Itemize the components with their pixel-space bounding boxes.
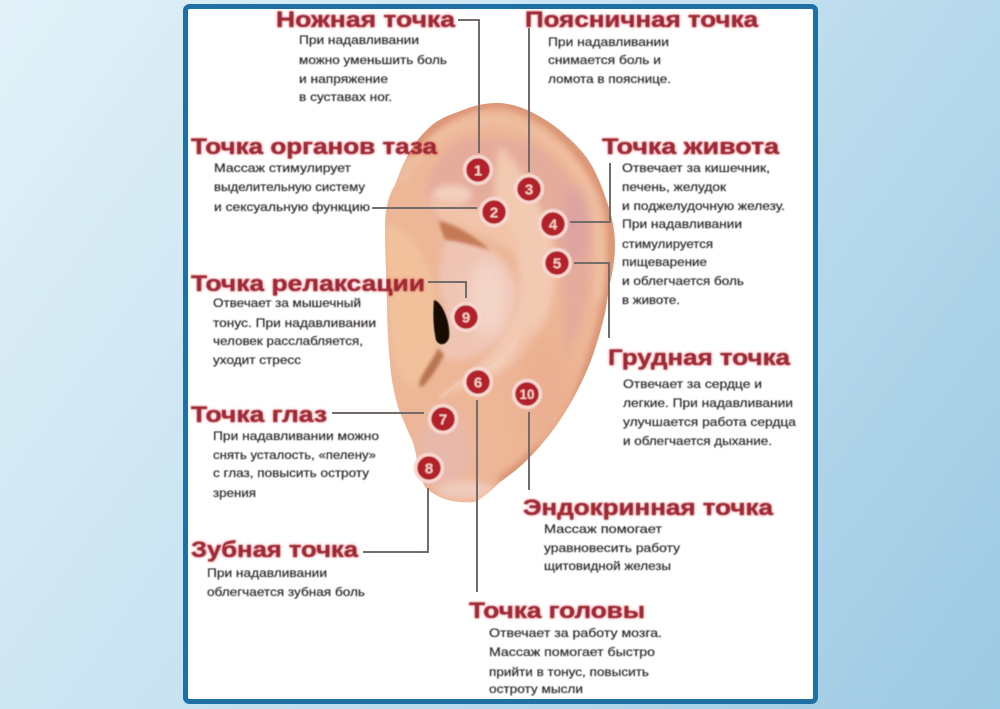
marker 7 [430, 406, 456, 432]
callout: dental point: облегчается зубная боль [207, 585, 365, 599]
leader lines [332, 20, 610, 592]
callout: pelvic organs point: и сексуальную функцию [214, 200, 370, 214]
marker 4 [540, 210, 566, 238]
marker 1: 1 [474, 162, 482, 180]
callout: endocrine point: Массаж помогает [544, 522, 663, 536]
callout: head point: Отвечает за работу мозга. [489, 626, 662, 640]
scapha pink shade [569, 192, 588, 248]
marker 2: 2 [490, 204, 498, 222]
illustration: ear [385, 103, 615, 502]
helix hollow [432, 140, 588, 339]
marker 6: 6 [474, 374, 482, 392]
callout: relaxation point: Отвечает за мышечный [213, 296, 361, 310]
callout: abdomen point: Отвечает за кишечник, [622, 161, 770, 175]
callout: abdomen point: пищеварение [622, 255, 707, 269]
callout: foot point: можно уменьшить боль [299, 53, 447, 67]
callout: chest point: Отвечает за сердце и [623, 377, 762, 391]
callout: eye point: При надавливании можно [213, 429, 379, 443]
concha [438, 232, 517, 360]
antitragus fold line [440, 335, 518, 398]
callout: relaxation point: человек расслабляется, [213, 334, 363, 348]
callout: abdomen point: и облегчается боль [622, 274, 744, 288]
callout: relaxation point: уходит стресс [213, 353, 301, 367]
callout: relaxation point [191, 271, 425, 367]
callout: pelvic organs point: Точка органов таза [191, 134, 438, 159]
callout: lumbar point: При надавливании [548, 35, 669, 49]
callout: endocrine point: Эндокринная точка [523, 495, 774, 520]
callout: foot point: и напряжение [299, 72, 388, 86]
callout: lumbar point: Поясничная точка [525, 7, 759, 32]
callout: abdomen point [602, 134, 785, 307]
callout: pelvic organs point: Массаж стимулирует [214, 161, 352, 175]
callout: abdomen point: печень, желудок [622, 180, 727, 194]
marker 6 [464, 368, 492, 396]
callout: eye point [191, 402, 379, 500]
lobe shade [419, 412, 471, 488]
callout: head point [469, 598, 662, 696]
ear canal [433, 300, 449, 344]
callout: chest point: Грудная точка [608, 345, 791, 370]
callout: lumbar point: ломота в пояснице. [548, 72, 671, 86]
marker 5: 5 [553, 256, 561, 272]
marker 1 [464, 156, 492, 184]
upper fossa highlight [432, 185, 472, 205]
callout: dental point: При надавливании [207, 566, 327, 580]
callout: head point: Точка головы [469, 598, 645, 623]
callout: head point: Массаж помогает быстро [489, 645, 655, 659]
callout: head point: прийти в тонус, повысить [489, 665, 649, 679]
notch shadow [419, 348, 444, 387]
marker 4: 4 [549, 216, 558, 234]
callout: lumbar point: снимается боль и [548, 53, 661, 67]
callout: dental point: Зубная точка [191, 537, 359, 562]
marker 8 [416, 454, 442, 482]
callout: foot point: При надавливании [299, 33, 419, 47]
callout: abdomen point: Точка живота [602, 134, 780, 159]
marker 9 [452, 304, 480, 330]
marker 5 [544, 250, 570, 276]
marker 3: 3 [525, 182, 533, 198]
rim highlight [402, 120, 600, 300]
marker 10 [514, 380, 540, 408]
callout: foot point: Ножная точка [276, 7, 456, 32]
callout: eye point: Точка глаз [191, 402, 327, 427]
callout: pelvic organs point: выделительную систему [214, 180, 365, 194]
callout: foot point: в суставах ног. [299, 90, 392, 104]
callout: abdomen point: стимулируется [622, 237, 713, 251]
callout: endocrine point [523, 495, 774, 573]
callout: foot point [276, 7, 456, 104]
crus shadow [439, 221, 490, 250]
callout: endocrine point: щитовидной железы [544, 559, 671, 573]
marker 3 [516, 176, 542, 202]
callout: eye point: зрения [213, 486, 256, 500]
marker 2 [480, 198, 508, 226]
callout: chest point [608, 345, 796, 448]
lower body warm shade [515, 330, 575, 450]
callout: chest point: легкие. При надавливании [623, 396, 793, 410]
callout: pelvic organs point [191, 134, 438, 214]
callout: relaxation point: тонус. При надавливании [213, 316, 376, 330]
marker 9: 9 [462, 310, 470, 326]
callout: head point: остроту мысли [489, 682, 583, 696]
callout: relaxation point: Точка релаксации [191, 271, 425, 296]
marker 7: 7 [439, 412, 447, 428]
callout: eye point: снять усталость, «пелену» [213, 448, 376, 462]
callout: abdomen point: и поджелудочную железу. [622, 199, 785, 213]
tragus [385, 228, 435, 384]
callout: abdomen point: в животе. [622, 293, 680, 307]
callout: chest point: улучшается работа сердца [623, 415, 796, 429]
marker 8: 8 [425, 460, 433, 478]
callout: abdomen point: При надавливании [622, 217, 742, 231]
callout: chest point: и облегчается дыхание. [623, 434, 772, 448]
marker 10: 10 [520, 386, 535, 402]
callout: dental point [191, 537, 365, 599]
outer rim shading [408, 103, 612, 482]
callout: endocrine point: уравновесить работу [544, 541, 680, 555]
panel: white card with blue frame [186, 6, 816, 702]
callout: lumbar point [525, 7, 759, 86]
callout: eye point: с глаз, повысить остроту [213, 466, 369, 480]
crus band [430, 200, 511, 248]
antihelix band [450, 145, 555, 395]
